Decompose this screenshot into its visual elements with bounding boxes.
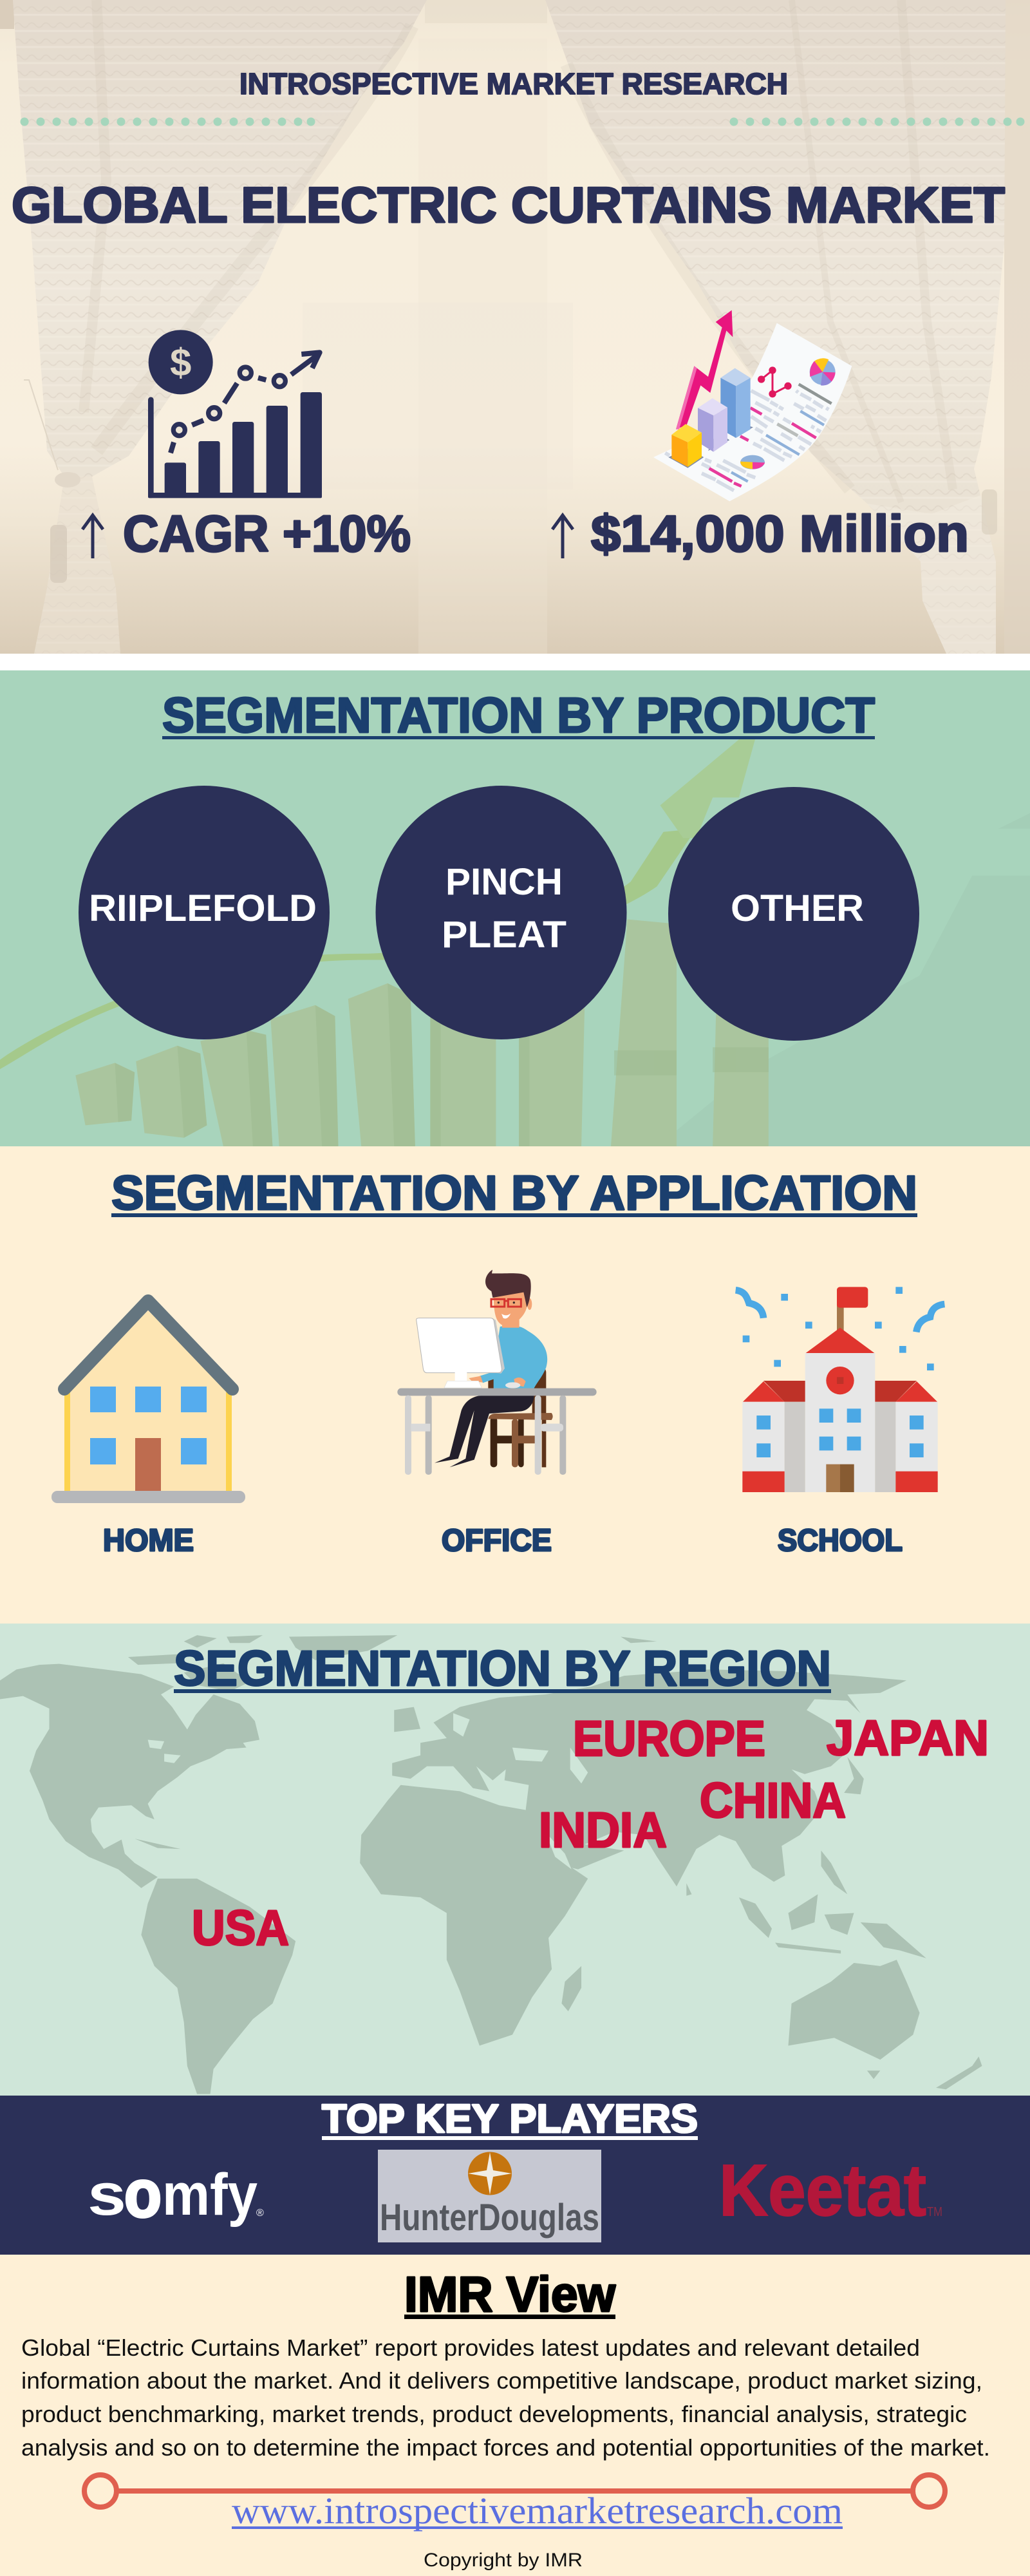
panel: hero	[0, 0, 1030, 670]
stat: CAGR: CAGR +10%	[123, 505, 411, 562]
logo: somfy: ®	[256, 2208, 264, 2219]
body text: Global “Electric Curtains Market” report provides latest updates and relevant detailed	[21, 2334, 920, 2361]
icon: office worker at desk	[397, 1270, 597, 1475]
bubble: pinch pleat: PLEAT	[442, 914, 566, 956]
icon: growth chart with dollar coin: $	[170, 341, 191, 384]
label: home: HOME	[103, 1524, 194, 1558]
body text: product benchmarking, market trends, product developments, financial analysis, strategic	[21, 2401, 967, 2427]
bubble: pinch pleat: PINCH	[445, 861, 563, 903]
dotted divider left	[21, 117, 315, 126]
logo: keetat: Keetat	[719, 2150, 926, 2231]
panel: IMR view	[0, 2255, 1030, 2576]
logo: hunter douglas	[378, 2150, 601, 2242]
bubble: other	[668, 787, 919, 1041]
bubble: riplefold: RIIPLEFOLD	[89, 887, 317, 929]
heading: SEGMENTATION BY PRODUCT	[162, 688, 875, 743]
curtain background	[0, 0, 1030, 670]
stat: market size: $14,000 Million	[591, 505, 969, 562]
heading: TOP KEY PLAYERS	[322, 2097, 698, 2141]
body text: information about the market. And it delivers competitive landscape, product market sizing,	[21, 2367, 982, 2394]
logo: somfy: s	[88, 2162, 126, 2228]
world map	[0, 1635, 982, 2094]
label: office: OFFICE	[442, 1524, 552, 1558]
bubble: pinch pleat	[376, 786, 627, 1039]
body text	[21, 2334, 990, 2461]
bubble: other: OTHER	[731, 887, 864, 929]
label: china: CHINA	[700, 1773, 846, 1828]
label: usa: USA	[192, 1900, 289, 1956]
label: school: SCHOOL	[778, 1524, 903, 1558]
panel: top key players	[0, 2096, 1030, 2255]
logo: somfy	[88, 2157, 264, 2231]
logo: somfy: mfy	[162, 2162, 258, 2228]
dotted divider right	[730, 117, 1025, 126]
panel: segmentation by product	[0, 670, 1030, 1146]
label: japan: JAPAN	[827, 1710, 989, 1766]
heading: IMR View	[404, 2267, 616, 2322]
heading: SEGMENTATION BY REGION	[174, 1641, 831, 1696]
copyright: Copyright by IMR	[424, 2550, 583, 2571]
body text: analysis and so on to determine the impact forces and potential opportunities of the market.	[21, 2434, 990, 2461]
icon: market report illustration	[653, 310, 852, 501]
panel: segmentation by region	[0, 1624, 1030, 2096]
website link: www.introspectivemarketresearch.com	[232, 2490, 843, 2532]
icon: school building	[736, 1287, 944, 1492]
icon: growth chart with dollar coin	[148, 330, 322, 498]
icon: home	[52, 1301, 245, 1503]
title: GLOBAL ELECTRIC CURTAINS MARKET	[12, 176, 1005, 233]
label: india: INDIA	[539, 1803, 667, 1858]
panel: segmentation by application	[0, 1146, 1030, 1624]
brand name: INTROSPECTIVE MARKET RESEARCH	[239, 67, 788, 100]
bubble: riplefold	[79, 786, 330, 1039]
logo: keetat: TM	[927, 2205, 942, 2219]
logo: somfy: o	[124, 2157, 162, 2231]
label: europe: EUROPE	[573, 1711, 765, 1766]
heading: SEGMENTATION BY APPLICATION	[111, 1166, 917, 1220]
logo: hunter douglas: HunterDouglas	[380, 2197, 599, 2239]
connector line with end rings	[84, 2475, 945, 2507]
rising bar chart background	[0, 670, 1030, 1146]
